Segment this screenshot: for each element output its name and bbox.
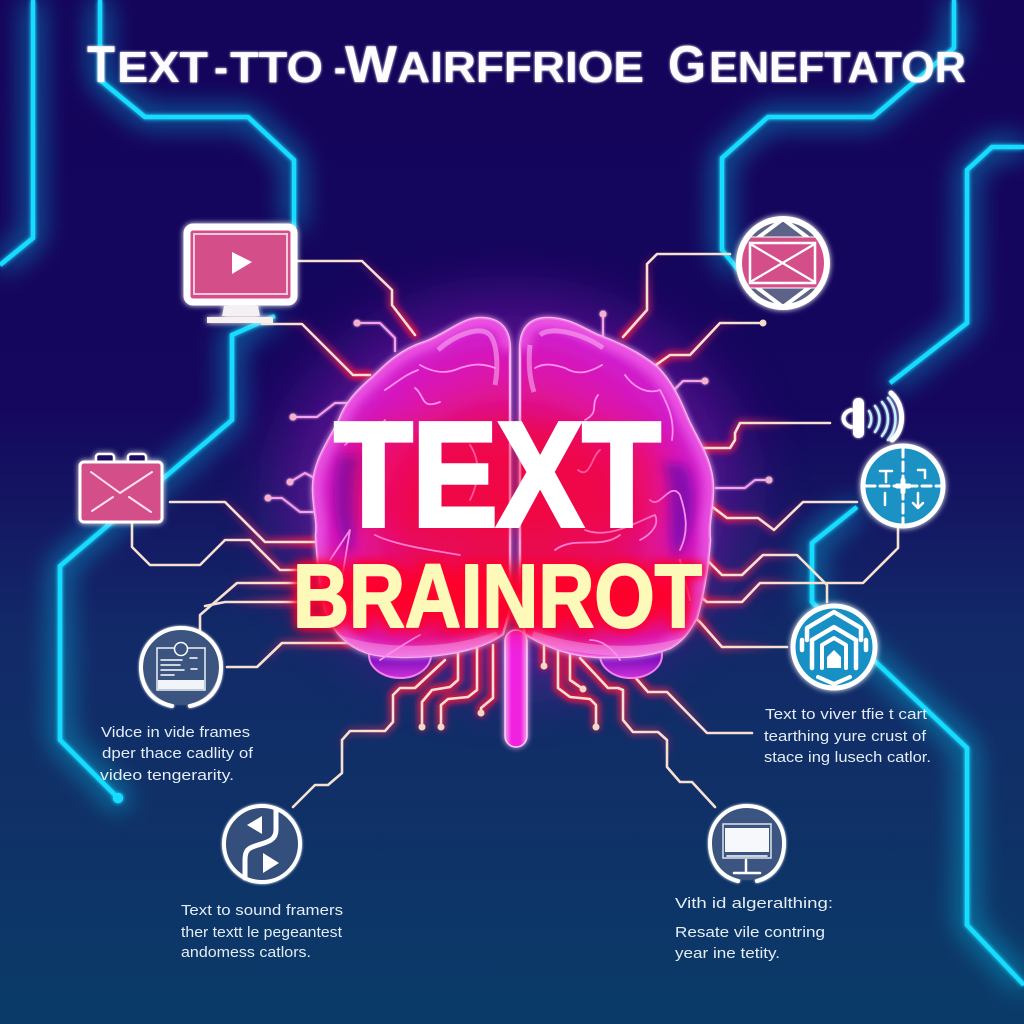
icon: mail case: [80, 454, 162, 522]
cerebellum lobes: [369, 632, 662, 678]
red glow behind text: [305, 430, 690, 624]
brain: [305, 318, 713, 747]
purple side shading: [335, 455, 694, 560]
text block: sound frames: Text to sound framers: [181, 902, 343, 919]
text block: viver: Text to viver tfie t cart: [765, 706, 928, 723]
title: G: [668, 36, 706, 94]
connector lines: left side: [132, 261, 445, 807]
icon: sound waves: [844, 393, 902, 440]
text block: sound frames: [181, 902, 343, 961]
icon: computer circle: [710, 806, 784, 881]
left hemisphere: [313, 318, 510, 657]
heading: TEXT: TEXT: [334, 392, 660, 558]
text block: viver: stace ing lusech catlor.: [764, 749, 931, 766]
right hemisphere: [520, 318, 713, 657]
title: -: [214, 43, 228, 92]
connector lines: right side: [580, 254, 898, 807]
text block: video frames: Vidce in vide frames: [101, 724, 250, 741]
icon: house circle: [793, 606, 875, 688]
icon: globe mail: [738, 219, 828, 307]
brain outer glow: [277, 295, 747, 685]
title: T: [87, 36, 115, 94]
icon: video monitor: [187, 227, 294, 323]
text block: video frames: video tengerarity.: [100, 767, 234, 784]
text block: viver: tearthing yure crust of: [764, 728, 927, 745]
heading: BRAINROT: BRAINROT: [293, 547, 702, 647]
text block: algorithm: year ine tetity.: [675, 945, 780, 962]
text block: sound frames: ther textt le pegeantest: [181, 924, 343, 941]
connector lines: bottom cluster: [422, 640, 596, 727]
text block: viver: [764, 706, 931, 766]
small pink nodes around brain: [264, 310, 772, 512]
title: TTO: [230, 43, 323, 92]
title: ENEFTATOR: [709, 43, 966, 92]
text block: algorithm: Resate vile contring: [675, 924, 825, 941]
icon: target circle: [863, 446, 943, 526]
red halo on connector lines near the brain: [132, 254, 898, 807]
text block: algorithm: [675, 895, 833, 962]
title: EXT: [117, 43, 208, 92]
brain fold lines: [330, 365, 690, 660]
text block: sound frames: andomess catlors.: [181, 944, 311, 961]
title: W: [345, 36, 398, 94]
icon: sound to video circle: [224, 806, 300, 882]
text block: video frames: [100, 724, 254, 784]
title: [87, 36, 966, 94]
text block: video frames: dper thace cadlity of: [102, 745, 254, 762]
text block: algorithm: Vith id algeralthing:: [675, 895, 833, 912]
pale inner rim and lobes: [313, 318, 713, 657]
connector end dots: bottom: [418, 320, 766, 730]
title: -: [334, 43, 346, 92]
title: AIRFFRIOE: [397, 43, 644, 92]
brain stem: [505, 630, 527, 747]
icon: document circle: [141, 628, 221, 706]
